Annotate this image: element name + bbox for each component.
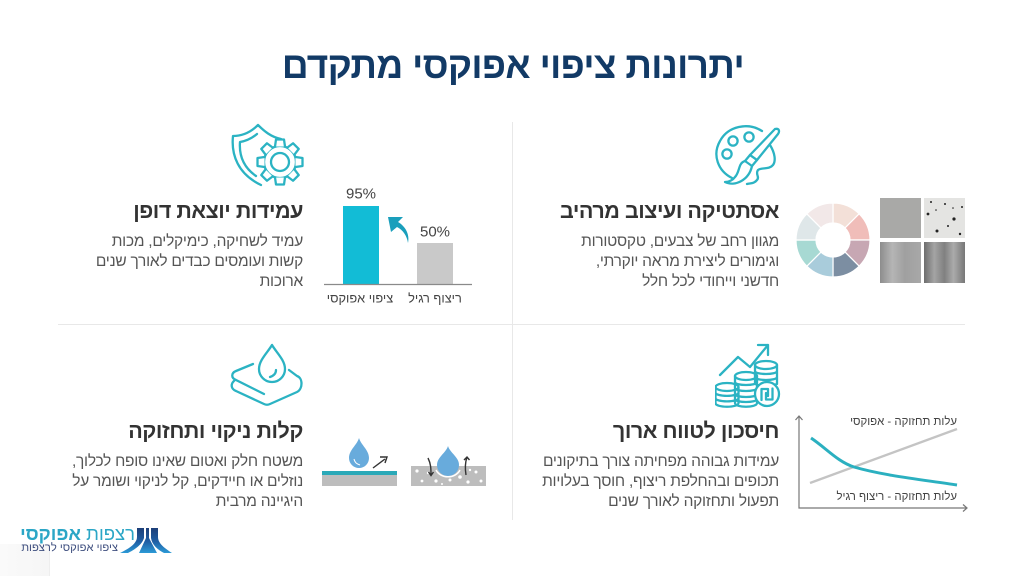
bar chart [324,186,472,306]
surface absorption diagram [322,438,486,486]
bar chart: 50% [420,224,450,240]
body text: חדשני וייחודי לכל חלל [642,273,779,290]
body text: תפעול ותחזוקה לאורך שנים [608,493,779,510]
body text: וגימורים ליצירת מראה יוקרתי, [596,253,779,270]
bar chart: ריצוף רגיל [408,290,462,306]
panel: easy cleaning [72,344,486,510]
body text: קשות ועומסים כבדים לאורך שנים [96,253,303,270]
body text: עמיד לשחיקה, כימיקלים, מכות [112,233,303,250]
logo mark [120,528,172,553]
icon: coins and growth arrow [715,344,780,408]
heading: עמידות יוצאת דופן [133,199,303,223]
logo [20,523,172,554]
logo tagline: ציפוי אפוקסי לרצפות [21,542,118,554]
line: epoxy [810,429,957,483]
bar chart: 95% [346,186,376,202]
body text: ארוכות [260,273,303,290]
bar chart: ציפוי אפוקסי [327,290,393,306]
heading: חיסכון לטווח ארוך [613,419,779,443]
panel: outstanding durability [96,124,472,306]
body text: עמידות גבוהה מפחיתה צורך בתיקונים [543,453,779,470]
body text [96,233,303,290]
line: regular floor [811,438,957,485]
body text: תכופים ובהחלפת ריצוף, חוסך בעלויות [542,473,779,490]
porous surface [411,446,486,486]
material swatches [880,198,965,283]
corner shade [0,544,50,576]
logo name: רצפות אפוקסי [20,523,135,544]
sealed surface [322,438,397,486]
panel: aesthetics and design [560,125,965,290]
line chart: maintenance cost: עלות תחזוקה - ריצוף רגיל [836,490,957,503]
body text [72,453,303,510]
icon: towel and drop [230,344,303,406]
line chart: maintenance cost [795,415,968,512]
body text: מגוון רחב של צבעים, טקסטורות [581,233,779,250]
body text: נוזלים או חיידקים, קל לניקוי ושומר על [72,473,303,490]
body text: משטח חלק ואטום שאינו סופח לכלוך, [72,453,303,470]
icon: palette and brush [715,125,780,186]
heading: אסתטיקה ועיצוב מרהיב [560,199,779,223]
arrow: increase [388,217,408,243]
title: יתרונות ציפוי אפוקסי מתקדם [282,45,744,86]
bar: regular floor [417,243,453,284]
bar: epoxy coating [343,206,379,284]
body text [581,233,779,290]
panel: long-term savings [542,344,968,512]
line chart: maintenance cost: עלות תחזוקה - אפוקסי [850,415,957,428]
body text [542,453,779,510]
heading: קלות ניקוי ותחזוקה [128,419,303,443]
colour wheel [796,204,870,276]
icon: shield and gear [232,124,304,186]
body text: היגיינה מרבית [216,493,303,510]
